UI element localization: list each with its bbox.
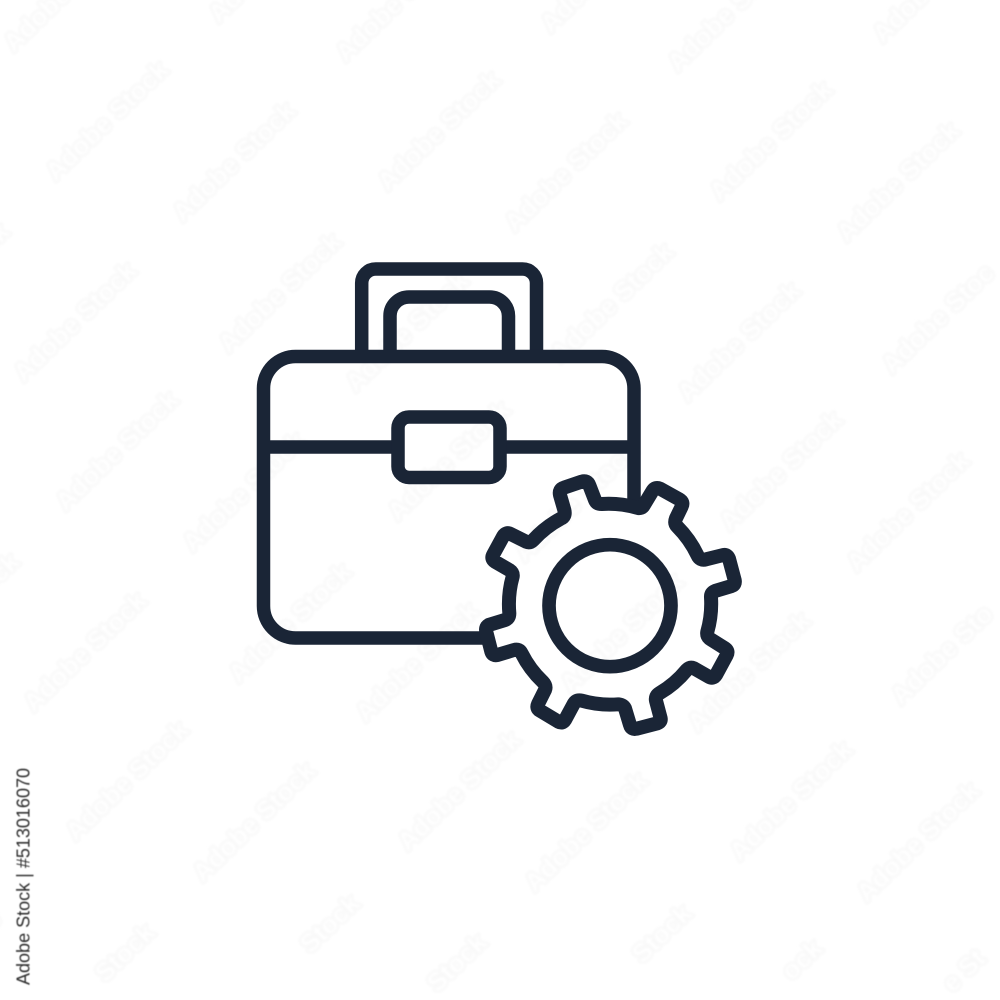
- stock image credit: Adobe Stock | #513016070: [14, 768, 34, 985]
- watermark: repeated Adobe Stock pattern: Adobe Stock: [681, 605, 816, 737]
- watermark: repeated Adobe Stock pattern: Adobe Stock: [830, 115, 965, 247]
- watermark: repeated Adobe Stock pattern: Adobe Stock: [713, 404, 848, 536]
- watermark: repeated Adobe Stock pattern: Adobe Stock: [186, 755, 321, 887]
- watermark: repeated Adobe Stock pattern: Adobe Stock: [391, 724, 526, 856]
- gear teeth outline: [486, 481, 735, 729]
- watermark: repeated Adobe Stock pattern: e St: [936, 943, 991, 998]
- watermark: repeated Adobe Stock pattern: Adobe Stock: [703, 74, 838, 206]
- watermark: repeated Adobe Stock pattern: Adobe Stock: [39, 54, 174, 186]
- watermark: repeated Adobe Stock pattern: Stock: [294, 888, 366, 959]
- watermark: repeated Adobe Stock pattern: Adobe Stock: [176, 425, 311, 557]
- watermark: repeated Adobe Stock pattern: Adobe Stock: [222, 556, 357, 688]
- watermark: repeated Adobe Stock pattern: Adobe Stock: [7, 255, 142, 387]
- watermark: repeated Adobe Stock pattern: Adobe Stock: [59, 714, 194, 846]
- briefcase inner handle: [390, 297, 508, 356]
- watermark: repeated Adobe Stock pattern: Adobe Stock: [544, 236, 679, 368]
- watermark: repeated Adobe Stock pattern: Adobe Stock: [850, 775, 985, 907]
- watermark: repeated Adobe Stock pattern: Adobe Stock: [339, 265, 474, 397]
- icon: gear: [486, 481, 735, 729]
- watermark: repeated Adobe Stock pattern: Stock: [626, 898, 698, 969]
- watermark: repeated Adobe Stock pattern: Adobe Stock: [166, 95, 301, 227]
- briefcase band right: [506, 440, 628, 454]
- watermark: repeated Adobe Stock pattern: Adobe Stock: [49, 384, 184, 516]
- watermark: repeated Adobe Stock pattern: Adobe Stock: [554, 566, 689, 698]
- watermark: repeated Adobe Stock pattern: ock: [775, 933, 828, 986]
- icon: briefcase: [264, 269, 634, 638]
- watermark: repeated Adobe Stock pattern: Adobe Stock: [498, 105, 633, 237]
- briefcase outer handle: [362, 269, 536, 356]
- watermark: repeated Adobe Stock pattern: Adobe Stock: [723, 734, 858, 866]
- watermark: repeated Adobe Stock pattern: Adobe Stoc: [875, 258, 1000, 379]
- watermark: repeated Adobe Stock pattern: Adobe Stock: [671, 275, 806, 407]
- watermark: repeated Adobe Stock pattern: Adobe Sto: [884, 599, 999, 710]
- briefcase band left: [270, 440, 392, 454]
- watermark: repeated Adobe Stock pattern: Adobe Stock: [508, 435, 643, 567]
- gear centre ring: [549, 545, 671, 667]
- briefcase clasp: [398, 417, 500, 478]
- watermark: repeated Adobe Stock pattern: Adobe Stock: [212, 226, 347, 358]
- watermark: repeated Adobe Stock pattern: Adobe Stock: [17, 585, 152, 717]
- watermark: repeated Adobe Stock pattern: Adobe Stock: [381, 394, 516, 526]
- watermark: repeated Adobe Stock pattern: Adobe Stock: [518, 765, 653, 897]
- watermark: repeated Adobe Stock pattern: Adobe Stock: [349, 595, 484, 727]
- watermark: repeated Adobe Stock pattern: Adobe Stock: [840, 445, 975, 577]
- watermark: repeated Adobe Stock pattern: Stock: [421, 927, 493, 998]
- watermark: repeated Adobe Stock pattern: Stock: [89, 917, 161, 988]
- watermark: repeated Adobe Stock pattern: Adobe Stock: [371, 64, 506, 196]
- briefcase body: [264, 356, 634, 638]
